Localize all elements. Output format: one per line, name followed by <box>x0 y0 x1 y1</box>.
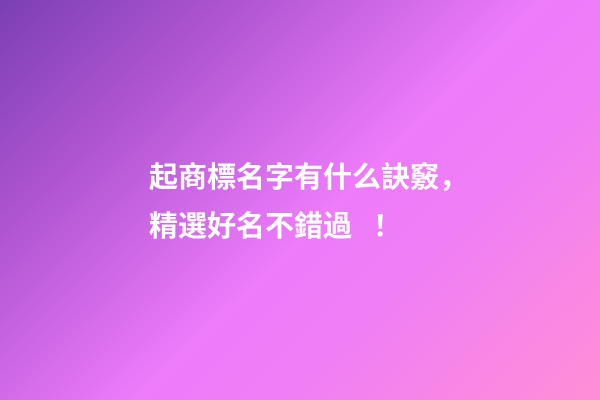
title line 2: 精選好名不錯過 <box>149 211 352 243</box>
title line 2: ！ <box>373 211 402 243</box>
title line 1: 起商標名字有什么訣竅， <box>149 162 468 194</box>
